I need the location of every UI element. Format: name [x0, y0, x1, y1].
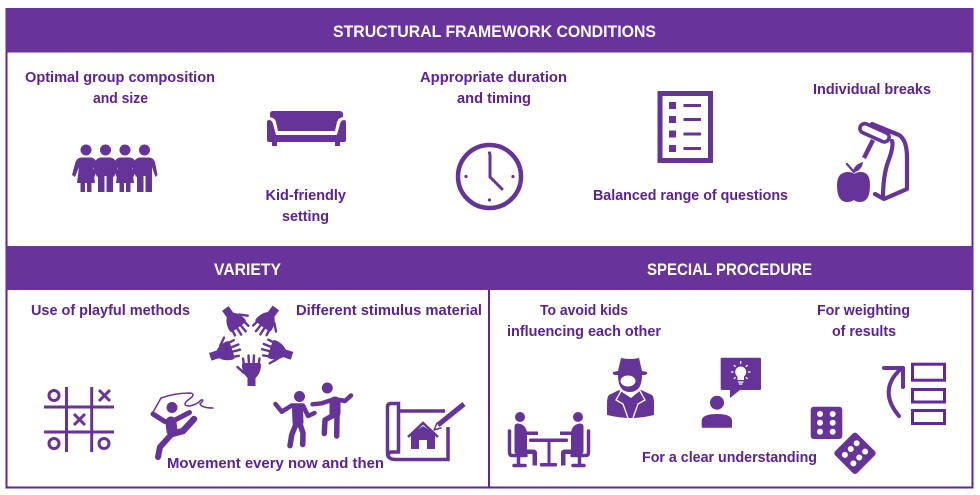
icon: sofa	[267, 111, 346, 146]
icon: two people at a table	[510, 412, 588, 466]
text: for weighting of results: of results	[832, 324, 896, 340]
text: to avoid kids influencing each other: To avoid kids	[540, 303, 628, 319]
text: kid-friendly setting	[266, 188, 346, 225]
header band: variety and special procedure: VARIETY	[214, 261, 281, 279]
icon: person with light bulb speech bubble	[702, 358, 761, 428]
text: for weighting of results	[817, 303, 910, 340]
icon: ribbon dancer	[152, 393, 213, 457]
icon: four children	[72, 144, 158, 192]
icon: two dancers	[276, 382, 351, 446]
header band: structural framework conditions	[6, 8, 973, 52]
text: kid-friendly setting: setting	[282, 209, 329, 225]
icon: question list	[660, 94, 710, 160]
text: kid-friendly setting: Kid-friendly	[266, 188, 346, 204]
text: use of playful methods: Use of playful methods	[31, 303, 190, 319]
header band: structural framework conditions: STRUCTURAL FRAMEWORK CONDITIONS	[333, 23, 656, 41]
text: optimal group composition and size: Optimal group composition	[25, 70, 215, 86]
icon: clock	[458, 145, 521, 208]
text: to avoid kids influencing each other	[507, 303, 661, 340]
icon: spy in hat and coat	[607, 358, 654, 418]
icon: weighting arrow and three boxes	[884, 364, 944, 424]
icon: dice	[811, 407, 877, 475]
header band: variety and special procedure	[6, 246, 973, 290]
icon: lunch bag and apple	[837, 122, 907, 202]
text: for weighting of results: For weighting	[817, 303, 910, 319]
text: to avoid kids influencing each other: influencing each other	[507, 324, 661, 340]
text: different stimulus material: Different stimulus material	[296, 303, 482, 319]
text: movement every now and then: Movement every now and then	[167, 456, 384, 472]
text: balanced range of questions: Balanced range of questions	[593, 188, 788, 204]
text: optimal group composition and size	[25, 70, 215, 107]
text: optimal group composition and size: and size	[93, 91, 148, 107]
icon: tic-tac-toe	[44, 387, 114, 452]
text: individual breaks: Individual breaks	[813, 82, 931, 98]
text: appropriate duration and timing	[420, 70, 567, 107]
text: appropriate duration and timing: Appropriate duration	[420, 70, 567, 86]
text: appropriate duration and timing: and timing	[457, 91, 531, 107]
header band: variety and special procedure: SPECIAL PROCEDURE	[647, 261, 812, 279]
text: for a clear understanding: For a clear understanding	[642, 450, 817, 466]
icon: blueprint and house	[388, 404, 465, 460]
icon: five hands	[206, 300, 295, 386]
